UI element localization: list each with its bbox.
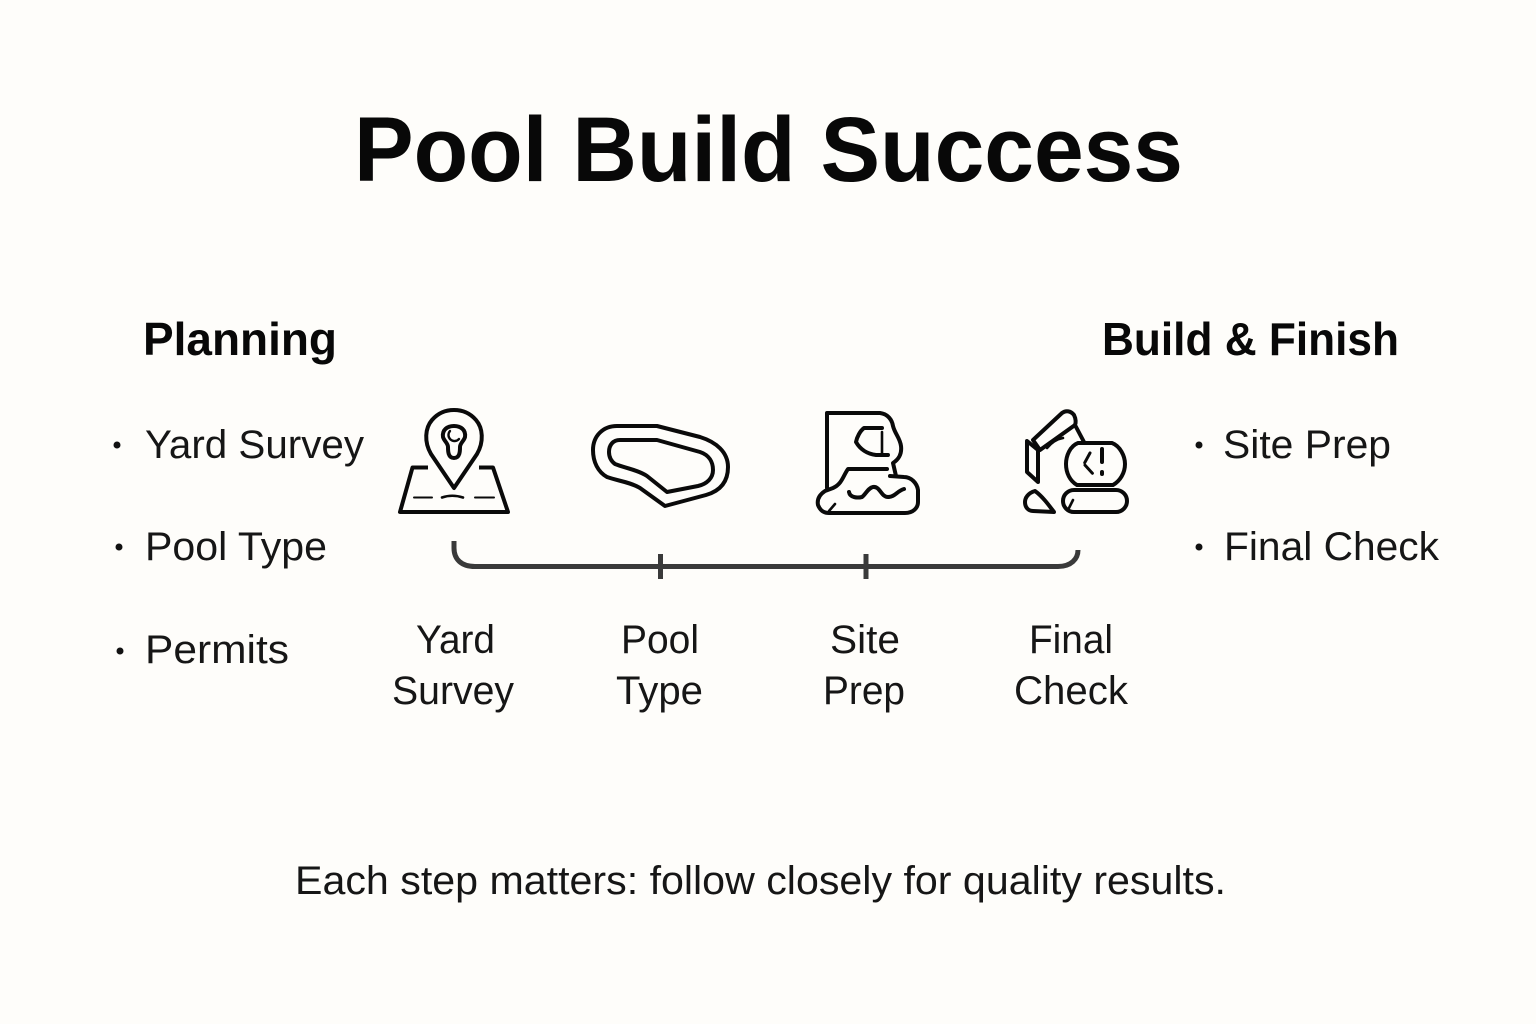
list item: site prep: Site Prep	[1223, 423, 1391, 467]
list item: permits: Permits	[145, 628, 289, 672]
step label: site prep	[823, 618, 905, 713]
step label: site prep: Prep	[823, 669, 905, 713]
heading: planning: Planning	[143, 313, 337, 365]
list item: final check: Final Check	[1224, 525, 1440, 569]
list item: yard survey: Yard Survey	[145, 423, 364, 467]
step label: pool type: Pool	[621, 618, 699, 662]
icon: site plan	[818, 413, 918, 513]
step label: pool type: Type	[616, 669, 703, 713]
step label: final check: Final	[1029, 618, 1113, 662]
step label: final check	[1014, 618, 1129, 713]
step label: yard survey: Yard	[416, 618, 495, 662]
title: Pool Build Success	[354, 99, 1183, 201]
timeline bracket	[454, 541, 1078, 579]
step label: yard survey	[392, 618, 514, 713]
footer note: Each step matters: follow closely for quality results.	[295, 859, 1226, 903]
panel: build and finish	[1102, 313, 1440, 569]
icon: pool shape	[593, 426, 728, 506]
list item: pool type: Pool Type	[145, 525, 327, 569]
step label: yard survey: Survey	[392, 669, 514, 713]
panel: planning	[114, 313, 364, 672]
icon: map pin on map	[400, 410, 508, 512]
step label: pool type	[616, 618, 703, 713]
step label: site prep: Site	[830, 618, 900, 662]
icon: excavator	[1025, 411, 1127, 512]
step label: final check: Check	[1014, 669, 1129, 713]
heading: build and finish: Build & Finish	[1102, 313, 1399, 365]
